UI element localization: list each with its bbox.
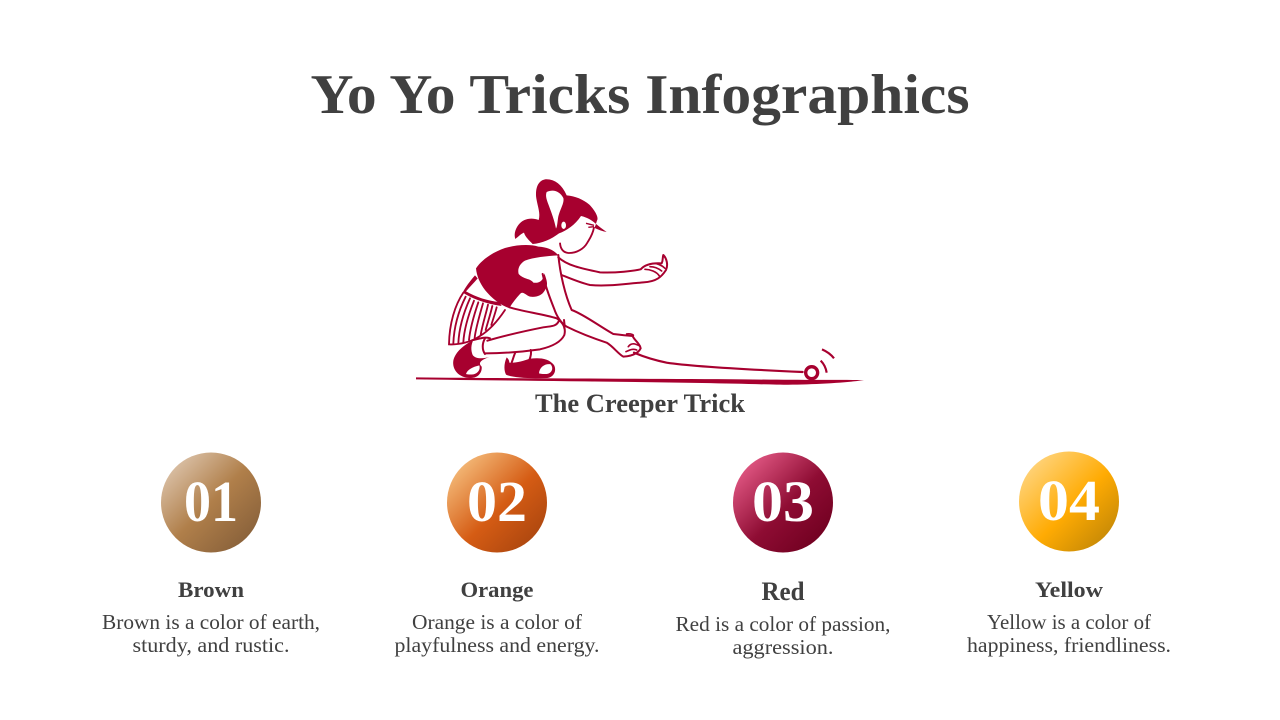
description brown: sturdy, and rustic. bbox=[132, 633, 290, 657]
description yellow: Yellow is a color of bbox=[987, 610, 1151, 634]
left shoe bbox=[453, 340, 490, 378]
motion lines bbox=[821, 349, 834, 373]
yo-yo string bbox=[634, 353, 803, 372]
right shoe bbox=[504, 357, 555, 378]
column 4: yellow bbox=[967, 452, 1171, 657]
ground line bbox=[416, 377, 864, 385]
column 1: brown bbox=[102, 452, 320, 657]
arms and hands bbox=[543, 255, 667, 357]
number badge 03: 03 bbox=[752, 469, 814, 534]
eye lashes bbox=[586, 223, 594, 227]
heading brown: Brown bbox=[178, 577, 244, 602]
heading yellow: Yellow bbox=[1035, 577, 1103, 602]
description orange bbox=[394, 610, 600, 657]
description brown bbox=[102, 610, 320, 657]
illustration: girl doing the creeper yo-yo trick bbox=[416, 179, 864, 385]
number badge 04 bbox=[1019, 452, 1119, 552]
hair and ponytail bbox=[515, 179, 607, 244]
description red: aggression. bbox=[732, 635, 834, 659]
illustration caption: The Creeper Trick bbox=[535, 389, 746, 418]
number badge 02: 02 bbox=[467, 469, 527, 534]
description yellow: happiness, friendliness. bbox=[967, 633, 1171, 657]
description red: Red is a color of passion, bbox=[676, 612, 890, 636]
number badge 02 bbox=[447, 452, 547, 552]
skirt bbox=[449, 293, 505, 344]
description orange: Orange is a color of bbox=[412, 610, 582, 634]
ear bbox=[561, 222, 566, 229]
description yellow bbox=[967, 610, 1171, 657]
top and shadow bbox=[476, 245, 558, 308]
waist band bbox=[463, 275, 502, 306]
number badge 01 bbox=[161, 452, 261, 552]
number badge 01: 01 bbox=[184, 469, 238, 534]
column 3: red bbox=[676, 452, 890, 659]
yo-yo bbox=[806, 367, 818, 379]
description brown: Brown is a color of earth, bbox=[102, 610, 320, 634]
legs outline bbox=[473, 307, 565, 363]
description red bbox=[676, 612, 890, 659]
column 2: orange bbox=[394, 452, 600, 657]
number badge 03 bbox=[733, 452, 833, 552]
title: Yo Yo Tricks Infographics bbox=[310, 64, 970, 126]
description orange: playfulness and energy. bbox=[394, 633, 600, 657]
number badge 04: 04 bbox=[1038, 468, 1100, 533]
heading orange: Orange bbox=[460, 577, 534, 602]
face and neck outline bbox=[560, 227, 594, 253]
heading red: Red bbox=[762, 577, 805, 606]
